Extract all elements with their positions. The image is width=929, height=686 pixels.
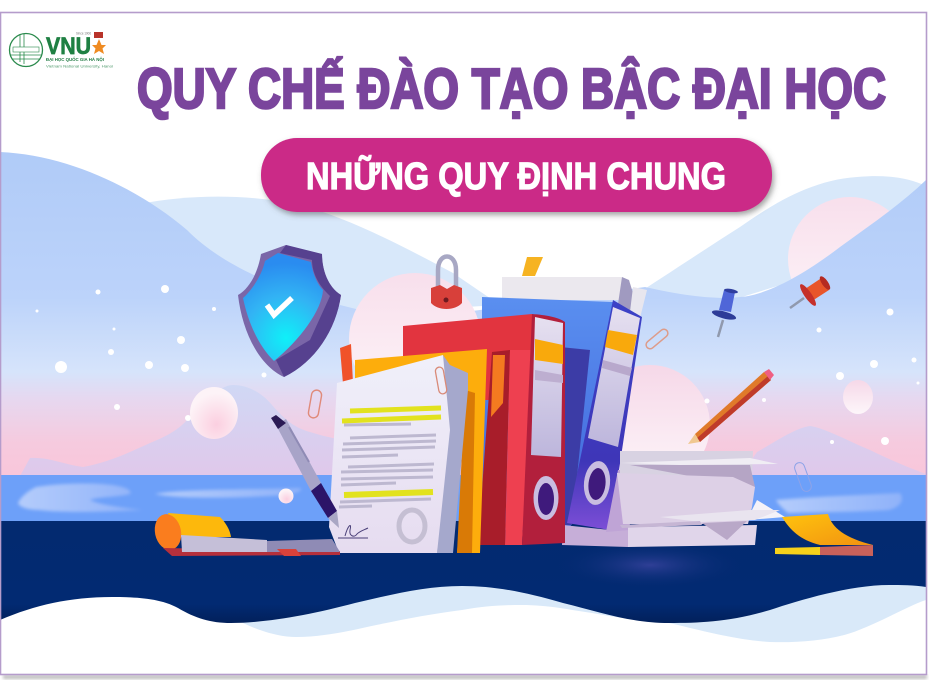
icon: paperclip left bbox=[308, 389, 322, 419]
sheet shadow bbox=[630, 465, 755, 487]
logo emblem bbox=[10, 34, 42, 66]
red ribbon bbox=[277, 549, 301, 556]
stamp bbox=[399, 510, 425, 542]
sky shape with gradient bbox=[0, 152, 926, 476]
orange band bbox=[535, 339, 563, 364]
shield dark right side bbox=[276, 245, 341, 377]
shackle bbox=[438, 256, 456, 288]
orange tab bbox=[491, 355, 505, 417]
bookmark yellow bbox=[522, 257, 543, 276]
yellow curl bbox=[168, 513, 231, 537]
curled note bbox=[782, 514, 873, 545]
small bubble on sea bbox=[278, 488, 294, 504]
check mark bbox=[267, 298, 292, 315]
pen tip bbox=[328, 511, 339, 528]
signature bbox=[338, 525, 368, 538]
snow dots bbox=[36, 285, 920, 445]
pill shape bbox=[261, 138, 772, 212]
pink sun right, clipped by sky bbox=[788, 197, 912, 321]
white flying sheet bbox=[747, 500, 785, 520]
bubble left bbox=[190, 387, 238, 439]
panel: landscape background bbox=[0, 152, 926, 642]
binder cover bbox=[482, 297, 613, 530]
logo english name: Vietnam National University, Hanoi bbox=[46, 64, 113, 68]
book block left bbox=[181, 535, 267, 552]
cover bright bbox=[505, 350, 532, 545]
pin base bbox=[711, 308, 737, 322]
icon: paperclip blue bbox=[793, 461, 813, 493]
note base red bbox=[820, 545, 873, 556]
logo name: ĐẠI HỌC QUỐC GIA HÀ NỘI bbox=[46, 55, 104, 62]
sheet bbox=[329, 355, 450, 553]
icon: paperclip right bbox=[644, 328, 670, 350]
spine bbox=[522, 314, 565, 545]
note base yellow bbox=[775, 547, 820, 555]
stack lilac side bbox=[606, 470, 630, 532]
keyhole bbox=[444, 298, 448, 302]
shadow triangle bbox=[702, 521, 747, 540]
red binder bbox=[403, 314, 565, 545]
sea bbox=[0, 475, 926, 522]
ring hole bbox=[587, 467, 607, 501]
pin needle bbox=[790, 298, 804, 308]
stack base lilac bbox=[562, 525, 628, 547]
clouds on sea bbox=[18, 483, 902, 513]
lower sheet bbox=[660, 510, 780, 522]
pill text: NHỮNG QUY ĐỊNH CHUNG bbox=[306, 154, 726, 198]
book left bbox=[152, 512, 340, 556]
red tag bbox=[340, 344, 353, 384]
top paper bbox=[502, 277, 622, 300]
binder ring bbox=[534, 476, 558, 520]
logo since text: Since 1906 bbox=[76, 32, 91, 36]
bubble right bbox=[843, 380, 873, 414]
pen body bbox=[276, 419, 321, 491]
pink sun centre bbox=[349, 273, 481, 405]
pencil eraser bbox=[764, 369, 774, 380]
dark cover shade bbox=[560, 347, 590, 525]
pin body bbox=[805, 277, 829, 301]
paperclip on document bbox=[435, 367, 447, 394]
pin top bbox=[724, 288, 738, 294]
icon: red push pin bbox=[790, 275, 832, 308]
light blue waves at bottom bbox=[243, 580, 926, 642]
middle block bbox=[617, 473, 755, 524]
orange curl bbox=[152, 512, 184, 552]
folder main bbox=[355, 349, 487, 553]
pin top bbox=[818, 275, 832, 291]
pin needle bbox=[718, 320, 723, 337]
pen grip bbox=[311, 483, 337, 518]
blue binder bbox=[482, 257, 647, 530]
pencil body bbox=[695, 372, 771, 442]
logo wordmark: VNU bbox=[46, 33, 91, 60]
spine label bbox=[588, 307, 640, 447]
pencil tip bbox=[688, 434, 700, 444]
pin base bbox=[798, 282, 818, 308]
desk glow bbox=[555, 541, 745, 589]
binder ring bbox=[582, 460, 612, 506]
document bbox=[329, 355, 450, 553]
mountain right bbox=[740, 426, 926, 476]
pen cap bbox=[271, 415, 286, 429]
folder shade bbox=[457, 390, 475, 553]
icon: pencil bbox=[688, 369, 774, 444]
bottom block bbox=[628, 525, 757, 547]
lock body bbox=[431, 285, 462, 309]
pencil shade bbox=[697, 376, 771, 442]
ring hole bbox=[538, 483, 554, 515]
text lines bbox=[339, 424, 436, 507]
subtitle pill bbox=[261, 138, 772, 212]
cover back bbox=[403, 314, 532, 400]
icon: blue push pin bbox=[711, 288, 738, 337]
grey pages bbox=[618, 277, 636, 310]
paper stack bbox=[562, 451, 785, 547]
pin body bbox=[719, 290, 735, 312]
sticky note right bbox=[775, 514, 873, 556]
pages behind document bbox=[437, 355, 468, 553]
logo flag bbox=[94, 32, 103, 38]
strip bbox=[620, 521, 702, 528]
icon: shield bbox=[238, 245, 341, 377]
logo star bbox=[92, 39, 106, 54]
orange band bbox=[605, 330, 637, 355]
lilac band bbox=[602, 360, 632, 376]
logo: VNU bbox=[10, 32, 113, 68]
icon: pen bbox=[271, 415, 339, 528]
highlighted lines bbox=[342, 408, 441, 495]
top sheet bbox=[620, 458, 778, 465]
book block right bbox=[267, 539, 340, 552]
cover dark bbox=[478, 350, 510, 545]
pen clip bbox=[289, 427, 309, 462]
base strip bbox=[163, 548, 340, 556]
white pages bbox=[630, 287, 647, 318]
frame drop shadow bbox=[3, 675, 927, 679]
shield inner bbox=[243, 253, 323, 361]
icon: padlock bbox=[431, 256, 462, 309]
orange folder bbox=[355, 349, 487, 553]
shield outer bbox=[238, 245, 341, 377]
navy desk bbox=[0, 521, 926, 623]
light blue hills bbox=[140, 176, 926, 320]
mountain left bbox=[20, 385, 345, 476]
spine label bbox=[531, 317, 563, 457]
spine bbox=[567, 300, 642, 530]
top block bbox=[620, 451, 753, 478]
lilac band bbox=[535, 370, 563, 383]
pink sun behind binders bbox=[590, 365, 710, 485]
